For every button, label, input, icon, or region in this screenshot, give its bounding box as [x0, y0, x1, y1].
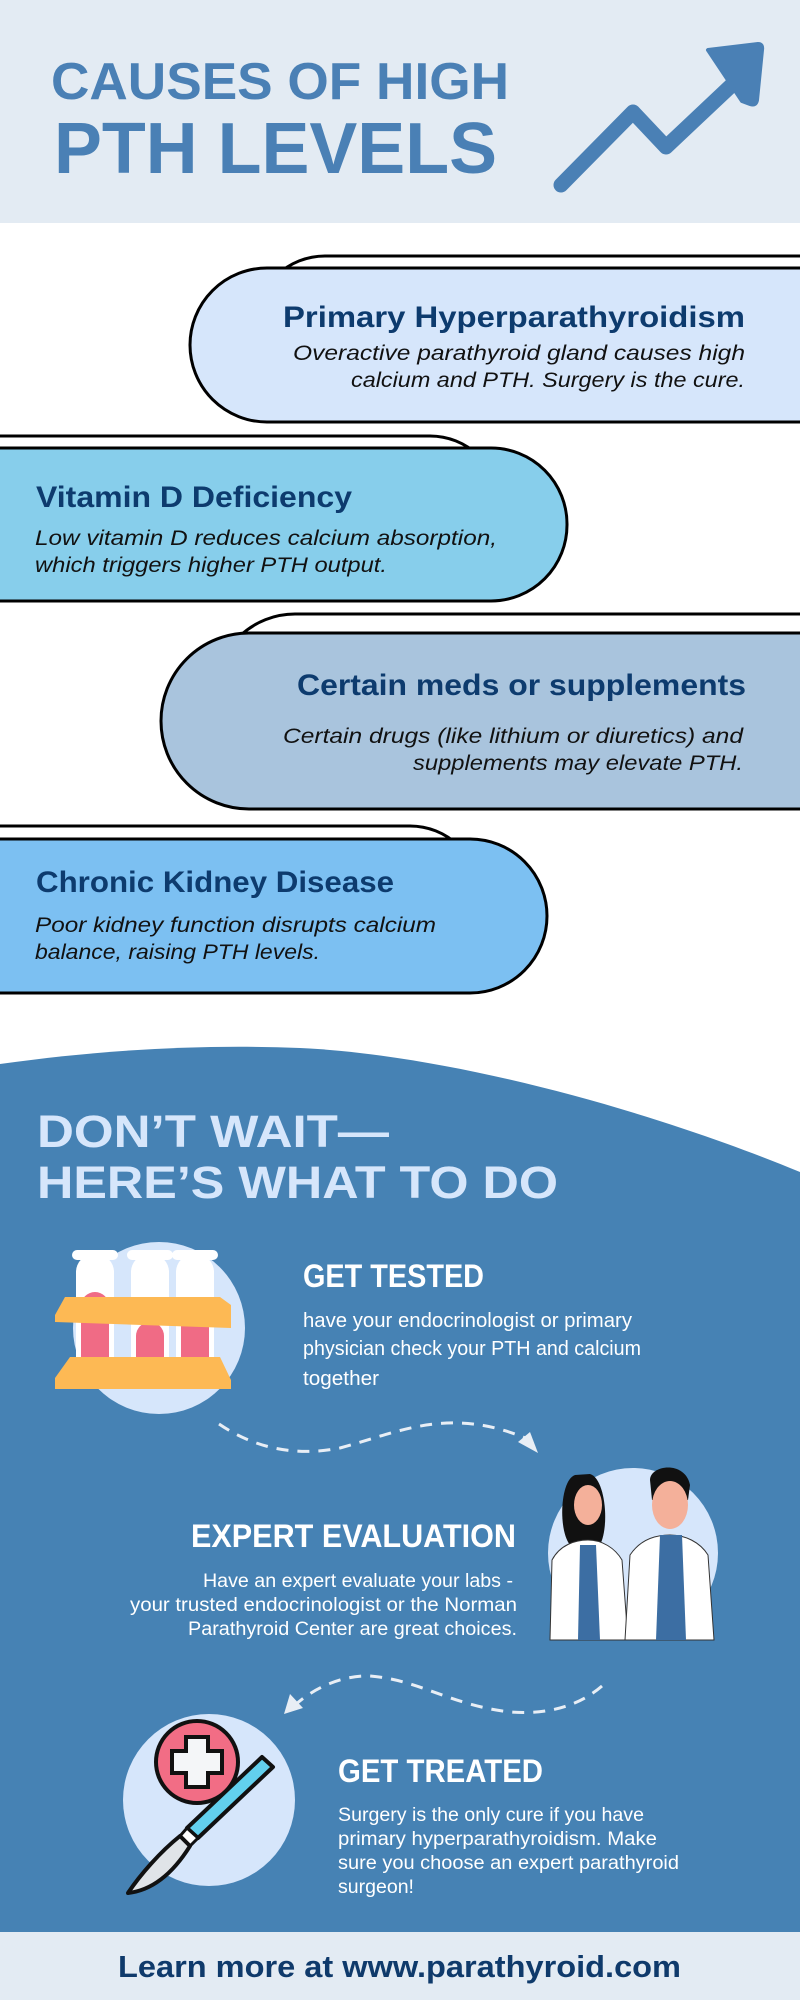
step: expert evaluation: your trusted endocrinologist or the Norman [130, 1595, 517, 1616]
footer: Learn more at www.parathyroid.com [118, 1949, 681, 1984]
step: get treated: GET TREATED [338, 1753, 543, 1789]
panel: chronic kidney disease: Chronic Kidney Disease [36, 866, 394, 899]
panel: chronic kidney disease [0, 826, 547, 993]
title: PTH LEVELS [54, 109, 497, 189]
header background [0, 0, 800, 223]
footer [0, 1932, 800, 2000]
step: get treated: Surgery is the only cure if you have [338, 1805, 644, 1826]
action section background wave [0, 1047, 800, 1932]
panel: vitamin D deficiency: which triggers higher PTH output. [35, 554, 387, 577]
step: get tested: have your endocrinologist or primary [303, 1310, 632, 1332]
action heading: DON’T WAIT— [37, 1106, 389, 1157]
panel: vitamin D deficiency [0, 436, 567, 601]
step: get tested: together [303, 1368, 379, 1390]
action heading [37, 1106, 558, 1208]
step: expert evaluation: Parathyroid Center are great choices. [188, 1619, 517, 1640]
icon: test tubes [55, 1242, 245, 1414]
panel: meds or supplements: Certain meds or supplements [297, 669, 746, 702]
step: expert evaluation [130, 1518, 517, 1640]
step: get tested [303, 1258, 641, 1390]
panel: primary hyperparathyroidism [190, 256, 800, 422]
panel: chronic kidney disease: Poor kidney function disrupts calcium [35, 914, 436, 937]
step: get treated: primary hyperparathyroidism. Make [338, 1829, 657, 1850]
step: get treated: sure you choose an expert parathyroid [338, 1853, 679, 1874]
panel: meds or supplements [161, 614, 800, 809]
step: expert evaluation: Have an expert evaluate your labs - [203, 1571, 513, 1592]
arrow: dashed to step 3 [284, 1676, 602, 1714]
title [51, 53, 509, 189]
step: get treated [338, 1753, 679, 1898]
action heading: HERE’S WHAT TO DO [37, 1157, 558, 1208]
step: get tested: GET TESTED [303, 1258, 484, 1294]
step: get treated: surgeon! [338, 1877, 414, 1898]
arrow: dashed to step 2 [219, 1423, 538, 1453]
panel: primary hyperparathyroidism: Overactive parathyroid gland causes high [293, 342, 745, 365]
panel: chronic kidney disease: balance, raising PTH levels. [35, 941, 320, 964]
title: CAUSES OF HIGH [51, 53, 509, 111]
panel: meds or supplements: Certain drugs (like lithium or diuretics) and [283, 725, 745, 748]
panel: vitamin D deficiency: Vitamin D Deficiency [36, 481, 352, 514]
icon: scalpel and medical cross [123, 1714, 295, 1893]
panel: vitamin D deficiency: Low vitamin D reduces calcium absorption, [35, 527, 497, 550]
step: expert evaluation: EXPERT EVALUATION [191, 1518, 516, 1554]
step: get tested: physician check your PTH and calcium [303, 1338, 641, 1360]
panel: meds or supplements: supplements may elevate PTH. [413, 752, 743, 775]
icon: rising arrow [561, 44, 762, 185]
panel: primary hyperparathyroidism: Primary Hyperparathyroidism [283, 301, 745, 334]
icon: doctors [548, 1468, 718, 1640]
panel: primary hyperparathyroidism: calcium and PTH. Surgery is the cure. [351, 369, 745, 392]
